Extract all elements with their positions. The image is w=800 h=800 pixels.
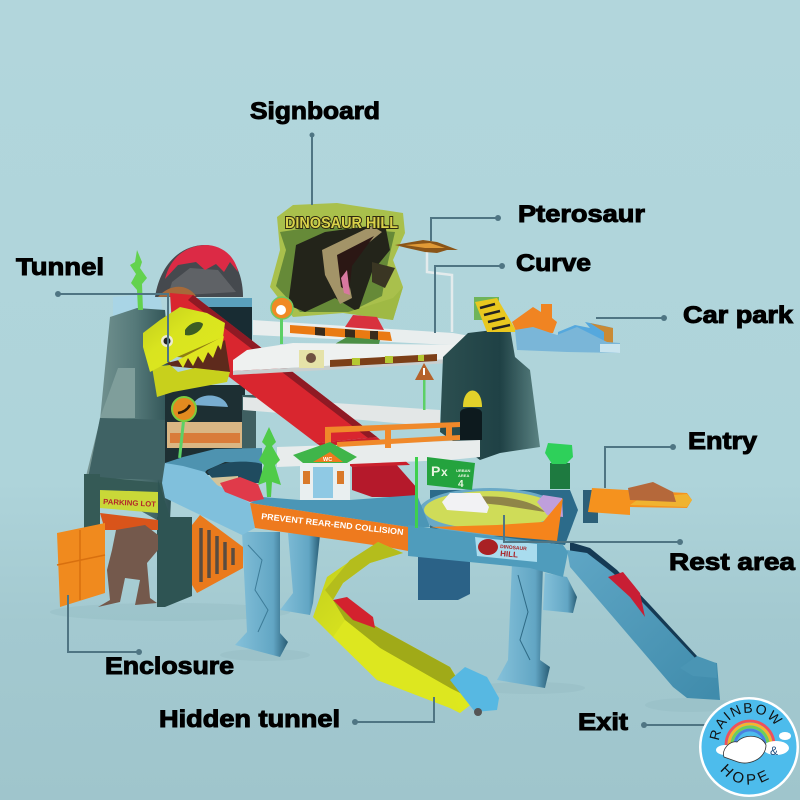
green gate — [545, 443, 573, 489]
volcano — [155, 245, 243, 297]
hidden tunnel track — [313, 542, 499, 716]
dinosaur head tunnel — [143, 307, 230, 397]
platform back — [250, 488, 578, 545]
green parking sign: 4 — [458, 479, 464, 490]
parking lot sign — [100, 490, 158, 513]
Dinosaur Hill badge: DINOSAUR — [500, 544, 527, 552]
label: Car park — [596, 302, 794, 329]
enclosure — [57, 474, 243, 607]
label: Entry — [605, 428, 758, 488]
blue car — [450, 667, 499, 716]
logo: Rainbow & Hope: RAINBOW — [710, 703, 783, 740]
van purple — [537, 495, 563, 517]
brown car — [628, 482, 676, 502]
light rock rim — [162, 463, 255, 535]
floor shadows — [50, 603, 735, 712]
white track 3 — [243, 397, 440, 427]
leg 5 — [543, 573, 577, 613]
red ramp — [170, 293, 417, 497]
logo: Rainbow & Hope: & — [770, 744, 778, 758]
platform orange deck — [430, 498, 563, 541]
label: Pterosaur — [431, 201, 645, 241]
label: Tunnel: Tunnel — [16, 254, 104, 281]
parking lot sign: PARKING LOT — [103, 497, 157, 509]
green tree on tower — [130, 250, 147, 310]
left mountain tower — [85, 293, 175, 520]
label: Hidden tunnel: Hidden tunnel — [159, 706, 340, 733]
green car on track — [333, 337, 380, 350]
green parking sign — [415, 457, 475, 528]
white track 2 — [233, 343, 470, 375]
logo: Rainbow & Hope — [699, 697, 799, 797]
Dinosaur Hill badge: HILL — [500, 549, 518, 560]
leg 2 — [280, 533, 320, 615]
warning sign — [415, 363, 434, 410]
white track 4 and orange railing — [277, 422, 480, 467]
wooden frame — [84, 474, 162, 530]
label: Tunnel — [16, 254, 168, 362]
label: Curve: Curve — [516, 250, 591, 277]
teal ring — [165, 448, 262, 487]
orange collision banner: PREVENT REAR-END COLLISION — [261, 511, 404, 537]
green parking sign: URBAN — [456, 468, 471, 473]
dinosaur figure — [98, 525, 158, 607]
orange collision banner — [250, 503, 408, 551]
label: Rest area: Rest area — [669, 549, 796, 576]
sign: round banana — [172, 397, 196, 458]
orange gate — [57, 523, 105, 607]
right mountain — [440, 328, 540, 460]
Dinosaur Hill badge — [475, 537, 537, 562]
red car on slide — [608, 572, 645, 617]
label: Hidden tunnel — [159, 697, 434, 733]
label: Exit: Exit — [578, 709, 628, 736]
white track 1 (top) — [253, 320, 470, 345]
legs — [235, 532, 577, 688]
red car on curve — [220, 477, 264, 502]
orange house — [512, 304, 557, 333]
green parking sign: AREA — [458, 473, 469, 478]
label: Rest area — [504, 515, 796, 576]
leg 4 — [497, 562, 550, 688]
signboard: Dinosaur Hill — [270, 203, 405, 320]
car park — [474, 297, 620, 353]
parked cars — [558, 322, 613, 343]
sign: round orange — [271, 297, 293, 344]
tower interior — [165, 298, 256, 475]
label: Signboard: Signboard — [250, 98, 380, 125]
entry ramp — [583, 482, 692, 523]
label: Entry: Entry — [688, 428, 758, 455]
label: Signboard — [250, 98, 380, 205]
WC building — [293, 442, 357, 500]
green parking sign: P — [431, 463, 440, 479]
pterosaur — [395, 240, 458, 332]
curve hole — [207, 462, 262, 485]
signboard title: DINOSAUR HILL — [285, 215, 398, 232]
platform front — [162, 448, 568, 577]
label: Curve — [435, 250, 591, 333]
label: Pterosaur: Pterosaur — [518, 201, 645, 228]
green parking sign: x — [441, 465, 448, 479]
exit slide — [567, 542, 720, 700]
label: Exit — [578, 709, 705, 736]
orange fence — [192, 515, 243, 593]
red car on top track — [345, 315, 384, 330]
label: Enclosure: Enclosure — [105, 653, 234, 680]
green tree by WC — [258, 427, 281, 497]
yellow crossing sign — [474, 297, 517, 332]
ice ledge — [515, 327, 620, 353]
WC text: WC — [323, 457, 332, 463]
label: Enclosure — [68, 595, 234, 680]
van white — [442, 493, 489, 513]
label: Car park: Car park — [683, 302, 794, 329]
leg 1 — [235, 532, 288, 657]
leg 3 — [418, 557, 470, 600]
red car — [333, 597, 375, 628]
logo: Rainbow & Hope: HOPE — [720, 764, 769, 785]
